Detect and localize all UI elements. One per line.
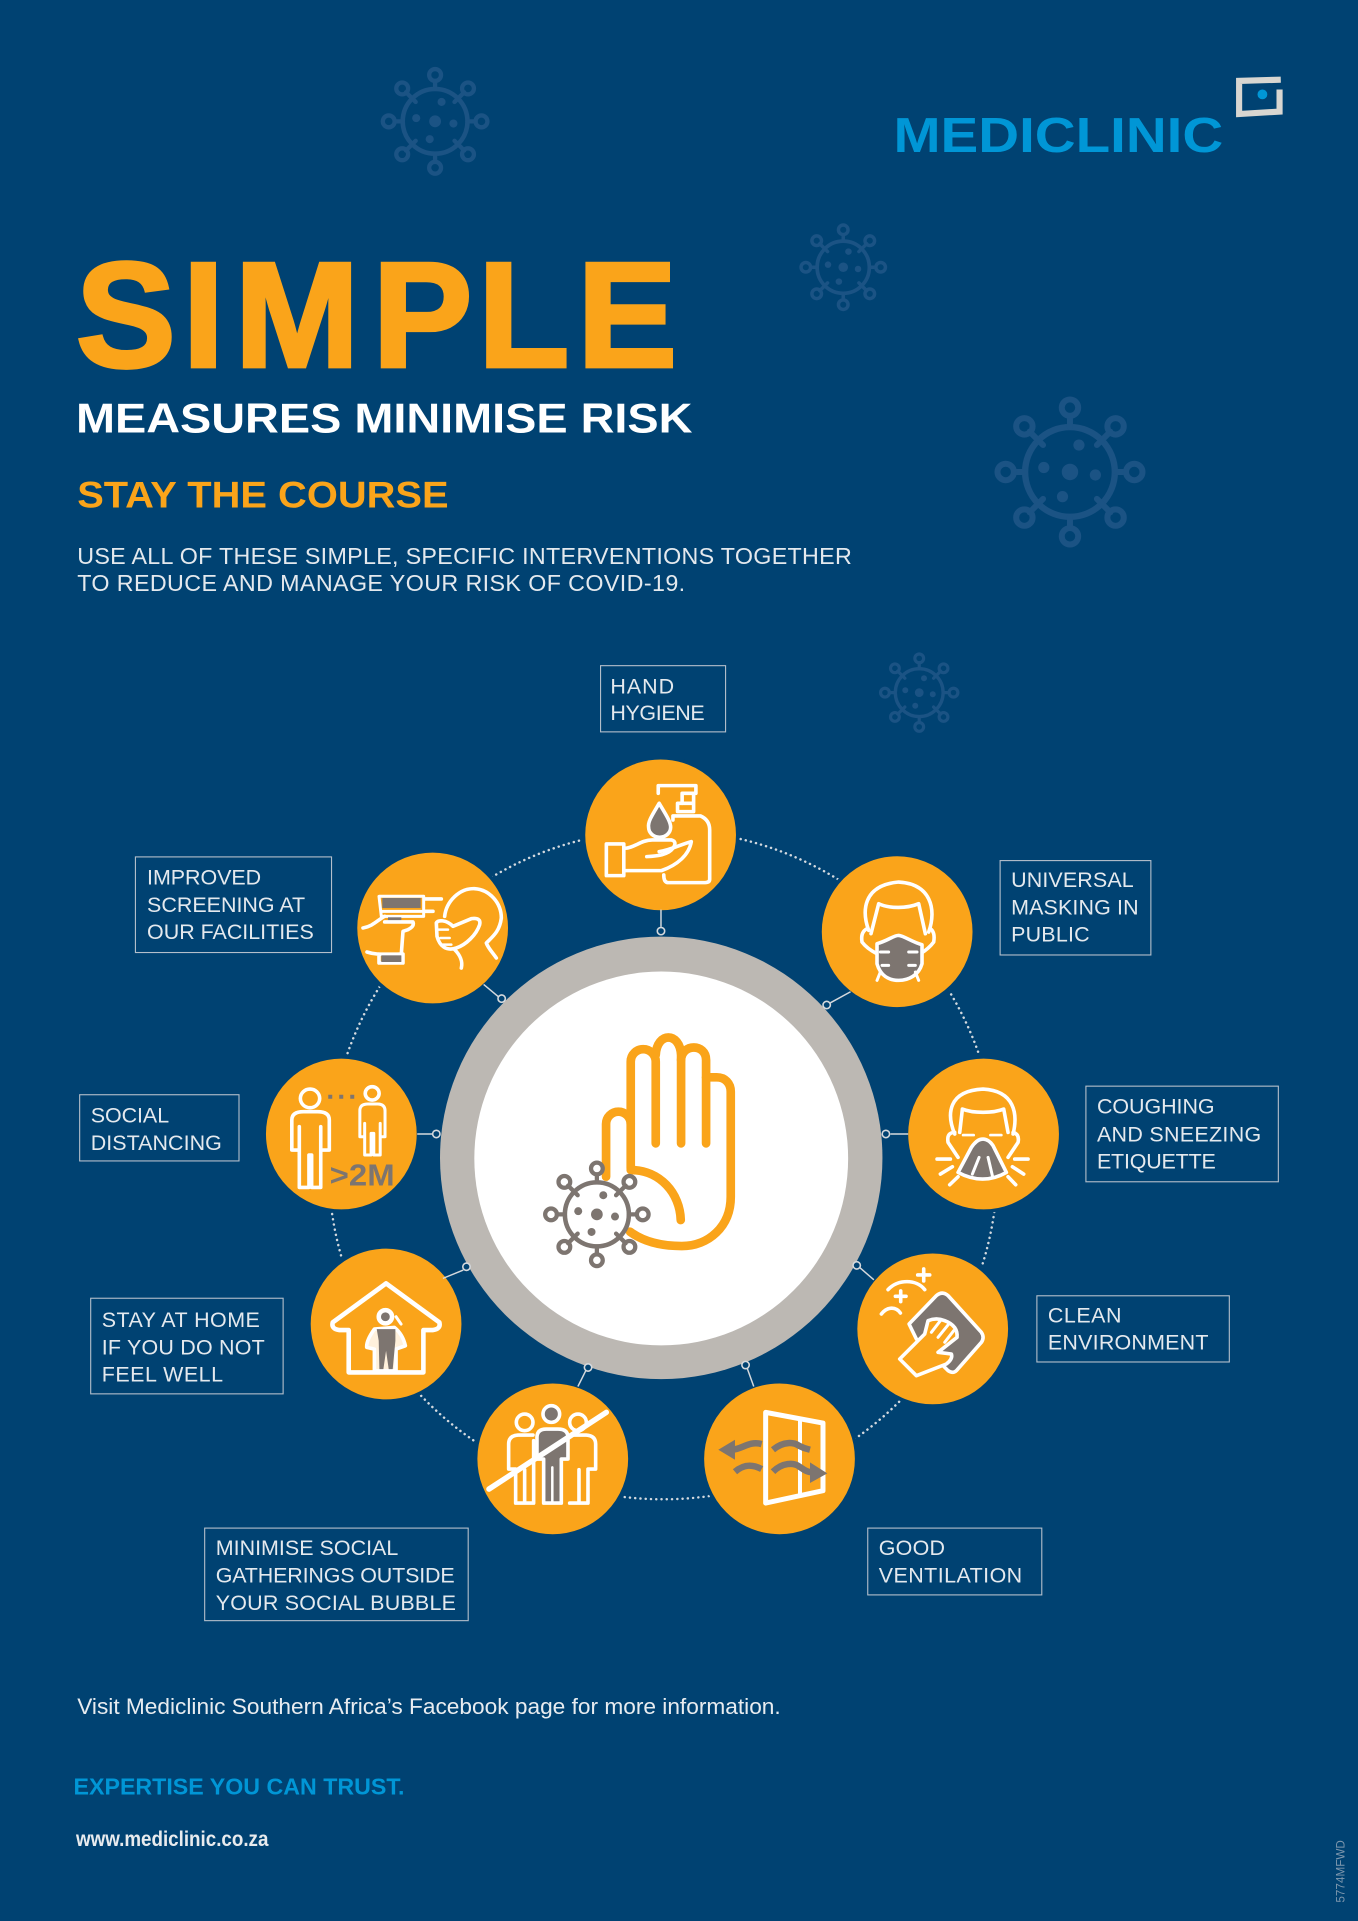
label: universal masking: UNIVERSAL <box>1011 868 1134 892</box>
centre panel: ring and hand <box>440 937 882 1379</box>
intro text: TO REDUCE AND MANAGE YOUR RISK OF COVID-19. <box>77 570 685 596</box>
footer: Facebook note: Visit Mediclinic Southern Africa’s Facebook page for more information. <box>77 1694 781 1719</box>
dotted orbit <box>328 830 998 1499</box>
intro text: USE ALL OF THESE SIMPLE, SPECIFIC INTERVENTIONS TOGETHER <box>77 543 852 569</box>
icon: stay at home <box>332 1283 440 1372</box>
tagline: EXPERTISE YOU CAN TRUST. <box>74 1774 404 1800</box>
label: clean environment <box>1037 1296 1229 1362</box>
icon: social distancing: >2M <box>330 1158 395 1192</box>
print code: 5774MFWD <box>1334 1840 1348 1903</box>
label: clean environment: CLEAN <box>1048 1304 1121 1328</box>
label: coughing and sneezing: ETIQUETTE <box>1097 1149 1216 1173</box>
label: stay at home: IF YOU DO NOT <box>102 1336 265 1360</box>
label: improved screening: OUR FACILITIES <box>147 920 314 944</box>
label: social distancing: DISTANCING <box>91 1131 222 1155</box>
label: coughing and sneezing <box>1086 1086 1278 1182</box>
title: SIMPLE <box>76 232 677 399</box>
label: good ventilation: GOOD <box>879 1536 945 1560</box>
label: hand hygiene: HAND <box>610 674 674 698</box>
label: universal masking: MASKING IN <box>1011 896 1139 920</box>
icon: improved screening <box>363 889 501 968</box>
label: coughing and sneezing: AND SNEEZING <box>1097 1122 1261 1146</box>
label: universal masking: PUBLIC <box>1011 922 1090 946</box>
label: universal masking <box>1000 861 1151 955</box>
label: improved screening: IMPROVED <box>147 865 261 889</box>
decorative virus icons <box>383 69 1142 731</box>
label: clean environment: ENVIRONMENT <box>1048 1331 1208 1355</box>
icon: minimise social gatherings <box>489 1406 606 1503</box>
label: improved screening <box>135 857 332 953</box>
subtitle: MEASURES MINIMISE RISK <box>76 395 692 442</box>
label: improved screening: SCREENING AT <box>147 893 305 917</box>
label: hand hygiene: HYGIENE <box>610 701 705 725</box>
label: good ventilation <box>868 1528 1042 1595</box>
label: minimise social gatherings: GATHERINGS OUTSIDE <box>216 1564 455 1588</box>
connectors <box>417 910 908 1387</box>
orbit circles <box>264 758 1061 1536</box>
icon: universal masking <box>862 882 934 980</box>
label: stay at home <box>91 1298 283 1394</box>
icon: clean environment <box>881 1269 983 1376</box>
label: minimise social gatherings: MINIMISE SOCIAL <box>216 1536 398 1560</box>
label: hand hygiene <box>601 666 726 732</box>
label: minimise social gatherings <box>205 1528 468 1621</box>
label: social distancing <box>80 1095 239 1161</box>
icon: raised hand <box>606 1037 731 1246</box>
intro text <box>77 543 852 596</box>
label: social distancing: SOCIAL <box>91 1103 169 1127</box>
label: stay at home: FEEL WELL <box>102 1363 223 1387</box>
icon: social distancing <box>292 1087 395 1192</box>
label: coughing and sneezing: COUGHING <box>1097 1095 1215 1119</box>
label: minimise social gatherings: YOUR SOCIAL BUBBLE <box>216 1591 456 1615</box>
label: good ventilation: VENTILATION <box>879 1564 1022 1588</box>
icon: coughing and sneezing <box>937 1089 1028 1185</box>
logo: Mediclinic: MEDICLINIC <box>893 109 1223 163</box>
icon: virus <box>545 1163 649 1266</box>
website: www.mediclinic.co.za <box>75 1828 269 1851</box>
logo: Mediclinic <box>893 80 1281 163</box>
icon: good ventilation <box>718 1412 827 1503</box>
label: stay at home: STAY AT HOME <box>102 1308 260 1332</box>
heading: stay the course: STAY THE COURSE <box>77 475 449 516</box>
icon: hand hygiene <box>606 786 710 883</box>
